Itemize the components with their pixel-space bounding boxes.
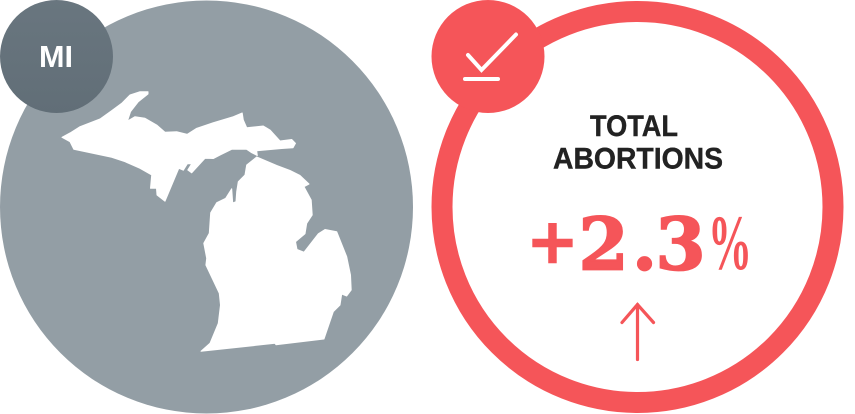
heading: TOTAL: [590, 110, 678, 143]
state abbreviation: MI: [39, 39, 73, 74]
plus sign: +: [526, 204, 578, 278]
state badge: [0, 0, 113, 113]
map: Upper Peninsula: [62, 92, 296, 201]
map: Michigan silhouette: [62, 92, 351, 351]
panel: total abortions: [432, 0, 833, 402]
panel: Michigan state map: [0, 0, 413, 414]
icon: check mark: [468, 34, 516, 70]
percent sign: %: [708, 199, 752, 286]
icon: underline: [465, 77, 498, 81]
statistic value: [526, 199, 752, 286]
heading: ABORTIONS: [553, 142, 723, 176]
map: Lower Peninsula: [201, 157, 351, 351]
icon: up arrow: [622, 304, 654, 360]
grey background circle: [0, 0, 413, 414]
red ring: [442, 12, 833, 402]
check badge: [432, 0, 544, 113]
badge circle: [0, 0, 113, 113]
number: 2.3: [578, 202, 706, 286]
badge circle: [432, 0, 544, 113]
